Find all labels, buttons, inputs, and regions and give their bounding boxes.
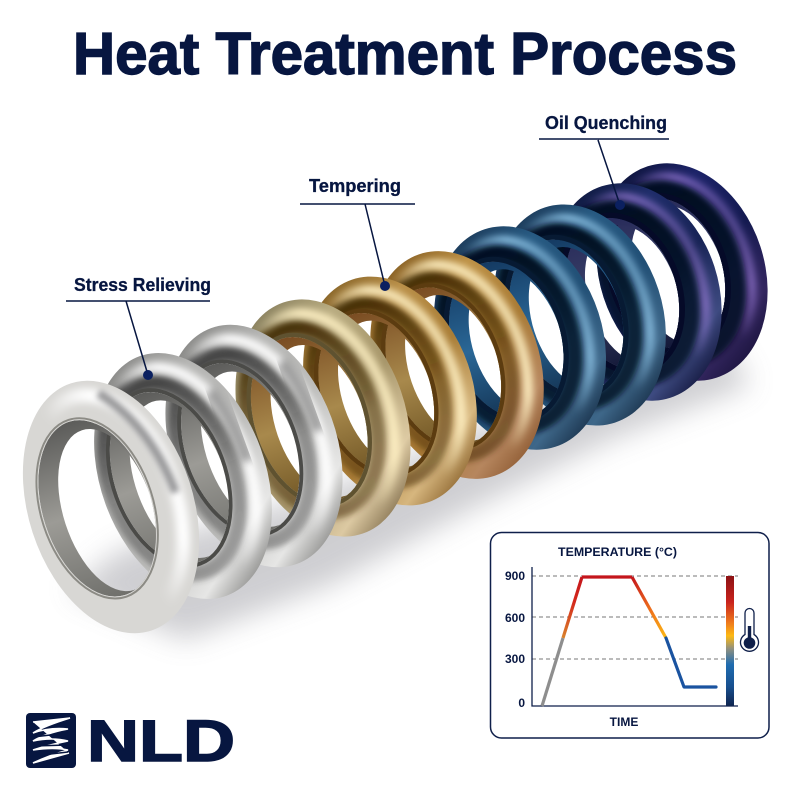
coil ring 1: flat cut end xyxy=(22,380,199,634)
callout: Stress Relieving: Stress Relieving xyxy=(74,275,211,295)
coil ring 8: blue xyxy=(496,204,666,426)
panel: temperature chart xyxy=(490,532,769,738)
callout: Tempering xyxy=(300,176,415,291)
icon: thermometer xyxy=(740,608,758,651)
y axis labels: 300 xyxy=(505,652,525,666)
callout: Tempering: Tempering xyxy=(309,176,401,196)
wordmark: NLD xyxy=(87,709,235,774)
x axis label: TIME xyxy=(610,715,638,729)
y axis labels: 0 xyxy=(518,696,525,710)
icon: spring mark xyxy=(26,713,76,768)
coil ring 2: silver xyxy=(94,353,272,599)
y axis labels xyxy=(505,569,525,710)
coil ring 3: silver xyxy=(165,324,342,567)
logo: NLD xyxy=(26,709,235,774)
y axis labels: 900 xyxy=(505,569,525,583)
coil spring xyxy=(22,163,768,634)
y axis labels: 600 xyxy=(505,611,525,625)
coil ground shadow xyxy=(70,350,750,640)
coil ring 6: copper xyxy=(370,251,544,479)
coil ring 9: navy xyxy=(554,183,722,401)
callout: Oil Quenching xyxy=(539,113,669,210)
coil ring 4: pale gold xyxy=(236,299,410,537)
chart axes xyxy=(532,567,738,706)
coil ring 10: purple xyxy=(596,163,768,381)
callout: Stress Relieving xyxy=(66,275,211,380)
coil ring 5: gold xyxy=(303,276,477,506)
coil ring 7: blue xyxy=(434,226,606,450)
callout: Oil Quenching: Oil Quenching xyxy=(545,113,667,133)
temperature curve xyxy=(542,577,716,706)
title: Heat Treatment Process xyxy=(73,21,737,87)
chart title: TEMPERATURE (°C) xyxy=(558,545,677,559)
temperature colour bar xyxy=(726,576,734,706)
